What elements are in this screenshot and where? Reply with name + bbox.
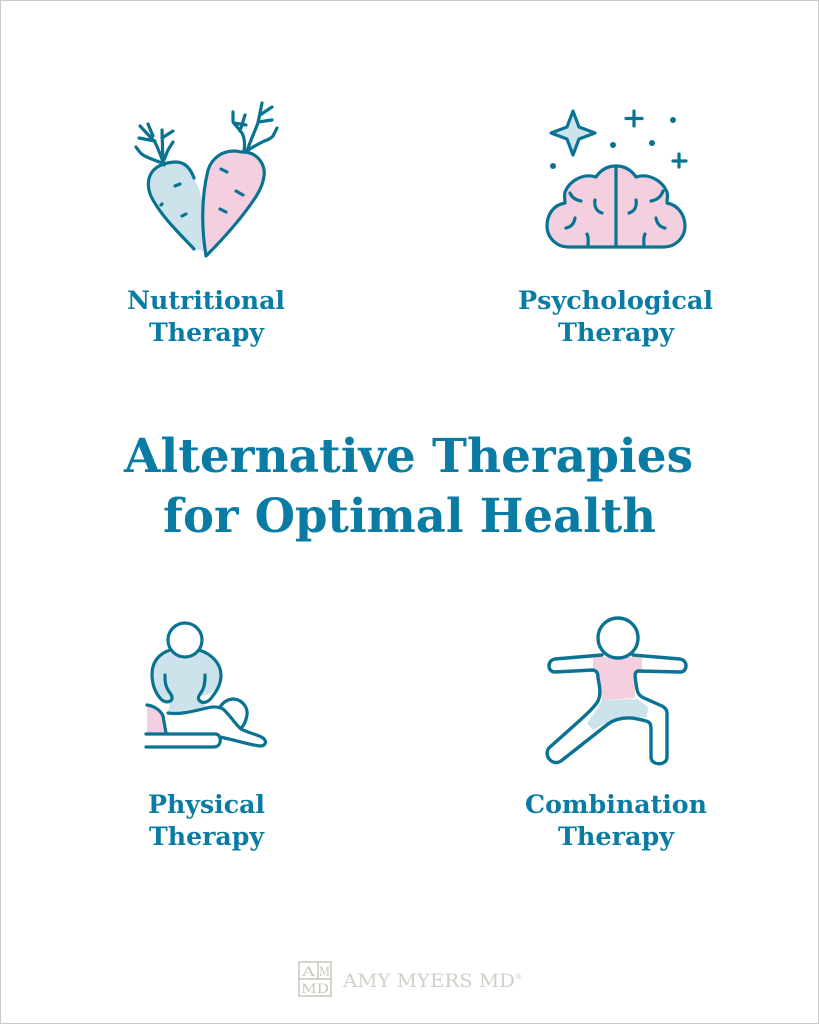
label: psychological therapy: Psychological bbox=[518, 286, 713, 315]
icon: four-point star bbox=[551, 111, 595, 155]
icon: brain with stars bbox=[547, 111, 686, 247]
label: combination therapy: Combination bbox=[525, 790, 707, 819]
registered mark: ® bbox=[515, 973, 522, 981]
logo mark: A bbox=[301, 965, 316, 980]
icon: yoga warrior pose bbox=[547, 618, 686, 764]
logo mark: M bbox=[319, 965, 330, 980]
title: Alternative Therapies bbox=[123, 429, 693, 484]
logo wordmark: AMY MYERS MD bbox=[342, 970, 515, 992]
label: psychological therapy: Therapy bbox=[558, 318, 675, 347]
label: physical therapy: Physical bbox=[148, 790, 265, 819]
label: physical therapy: Therapy bbox=[149, 822, 265, 851]
label: combination therapy: Therapy bbox=[558, 822, 675, 851]
label: physical therapy bbox=[148, 790, 265, 851]
label: nutritional therapy bbox=[127, 286, 285, 347]
label: psychological therapy bbox=[518, 286, 713, 347]
icon: massage bbox=[146, 623, 265, 747]
icon: carrots bbox=[136, 103, 277, 256]
logo mark: MD bbox=[301, 982, 329, 997]
label: nutritional therapy: Nutritional bbox=[127, 286, 285, 315]
logo: amy myers md bbox=[299, 962, 522, 997]
title bbox=[123, 429, 693, 544]
label: nutritional therapy: Therapy bbox=[149, 318, 265, 347]
logo mark bbox=[299, 962, 331, 997]
title: for Optimal Health bbox=[163, 489, 656, 544]
label: combination therapy bbox=[525, 790, 707, 851]
